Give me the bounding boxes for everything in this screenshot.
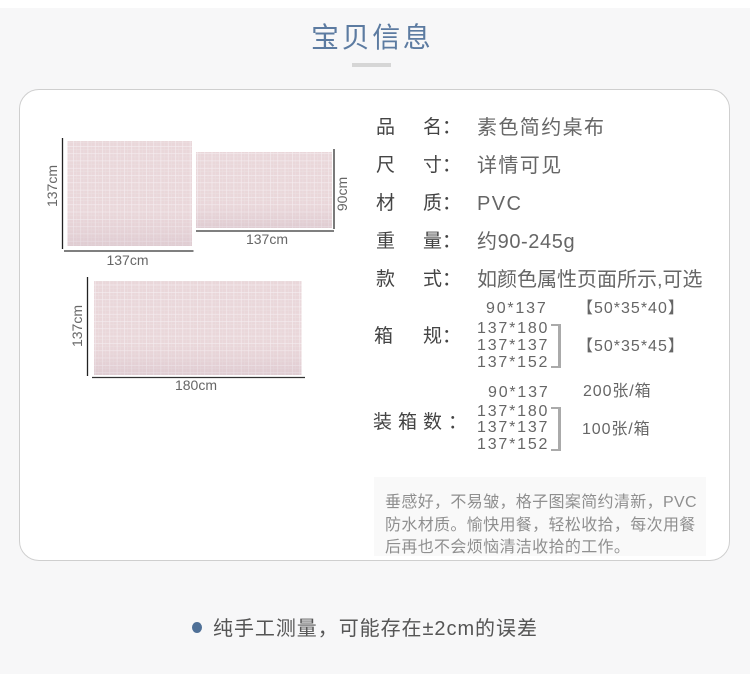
spec row: name [376,117,605,139]
spec row: carton size [374,300,685,371]
footnote: 纯手工测量，可能存在±2cm的误差 [213,618,538,640]
spec row: carton size: 【50*35*45】 [577,338,685,355]
spec row: style [376,269,703,291]
spec row: name: 素色简约桌布 [477,117,605,139]
diagram: 137 x 180: 137cm [69,305,85,347]
bullet dot [192,622,202,633]
spec row: weight: 重 [376,231,395,252]
spec row: carton size: 规： [423,326,461,347]
diagram: 137 x 137: 137cm [44,165,60,207]
description note box: 防水材质。愉快用餐，轻松收拾，每次用餐 [385,517,696,534]
spec row: carton size: 【50*35*40】 [577,300,685,317]
spec row: weight: 量： [423,231,461,252]
spec row: quantity per carton: 137*180 [477,403,549,420]
spec row: size: 详情可见 [477,155,563,177]
spec row: quantity per carton [373,382,652,453]
title: 宝贝信息 [311,22,433,53]
spec row: size: 寸： [423,155,461,176]
diagram: 137 x 137 [44,138,194,268]
diagram: 137 x 90: 137cm [246,231,288,247]
description note box: 后再也不会烦恼清洁收拾的工作。 [385,539,630,556]
spec row: style: 如颜色属性页面所示,可选 [477,269,703,291]
spec row: style: 式： [423,269,461,290]
spec row: carton size: 137*180 [477,320,549,337]
description note box: 垂感好，不易皱，格子图案简约清新，PVC [385,494,697,511]
spec row: quantity per carton: 137*152 [477,436,549,453]
spec row: material: 材 [376,193,395,214]
spec row: name: 名： [423,117,461,138]
spec row: carton size: 137*137 [477,337,549,354]
diagram: 137 x 180 [69,277,305,393]
diagram: 137 x 90: 90cm [334,177,350,211]
title underline [352,63,391,67]
spec row: quantity per carton: 100张/箱 [582,421,651,438]
diagram: 137 x 90 [196,149,350,247]
diagram: 137 x 137: 137cm [106,252,149,268]
diagram: 137 x 180: 180cm [175,377,217,393]
spec row: carton size: 箱 [374,326,393,347]
spec row: weight [376,231,575,253]
spec row: weight: 约90-245g [477,231,575,253]
spec row: carton size: 137*152 [477,354,549,371]
spec row: style: 款 [376,269,395,290]
spec row: material: PVC [477,193,522,215]
spec row: quantity per carton: 137*137 [477,419,549,436]
spec row: material: 质： [423,193,461,214]
spec row: quantity per carton: 装箱数： [373,412,473,433]
spec row: material [376,193,522,215]
spec row: quantity per carton: 90*137 [488,384,550,401]
spec row: carton size: 90*137 [486,300,548,317]
spec row: name: 品 [376,117,395,138]
panel: product information card [19,89,730,561]
spec row: size: 尺 [376,155,395,176]
spec row: size [376,155,563,177]
description note box [374,477,706,556]
spec row: quantity per carton: 200张/箱 [583,383,652,400]
